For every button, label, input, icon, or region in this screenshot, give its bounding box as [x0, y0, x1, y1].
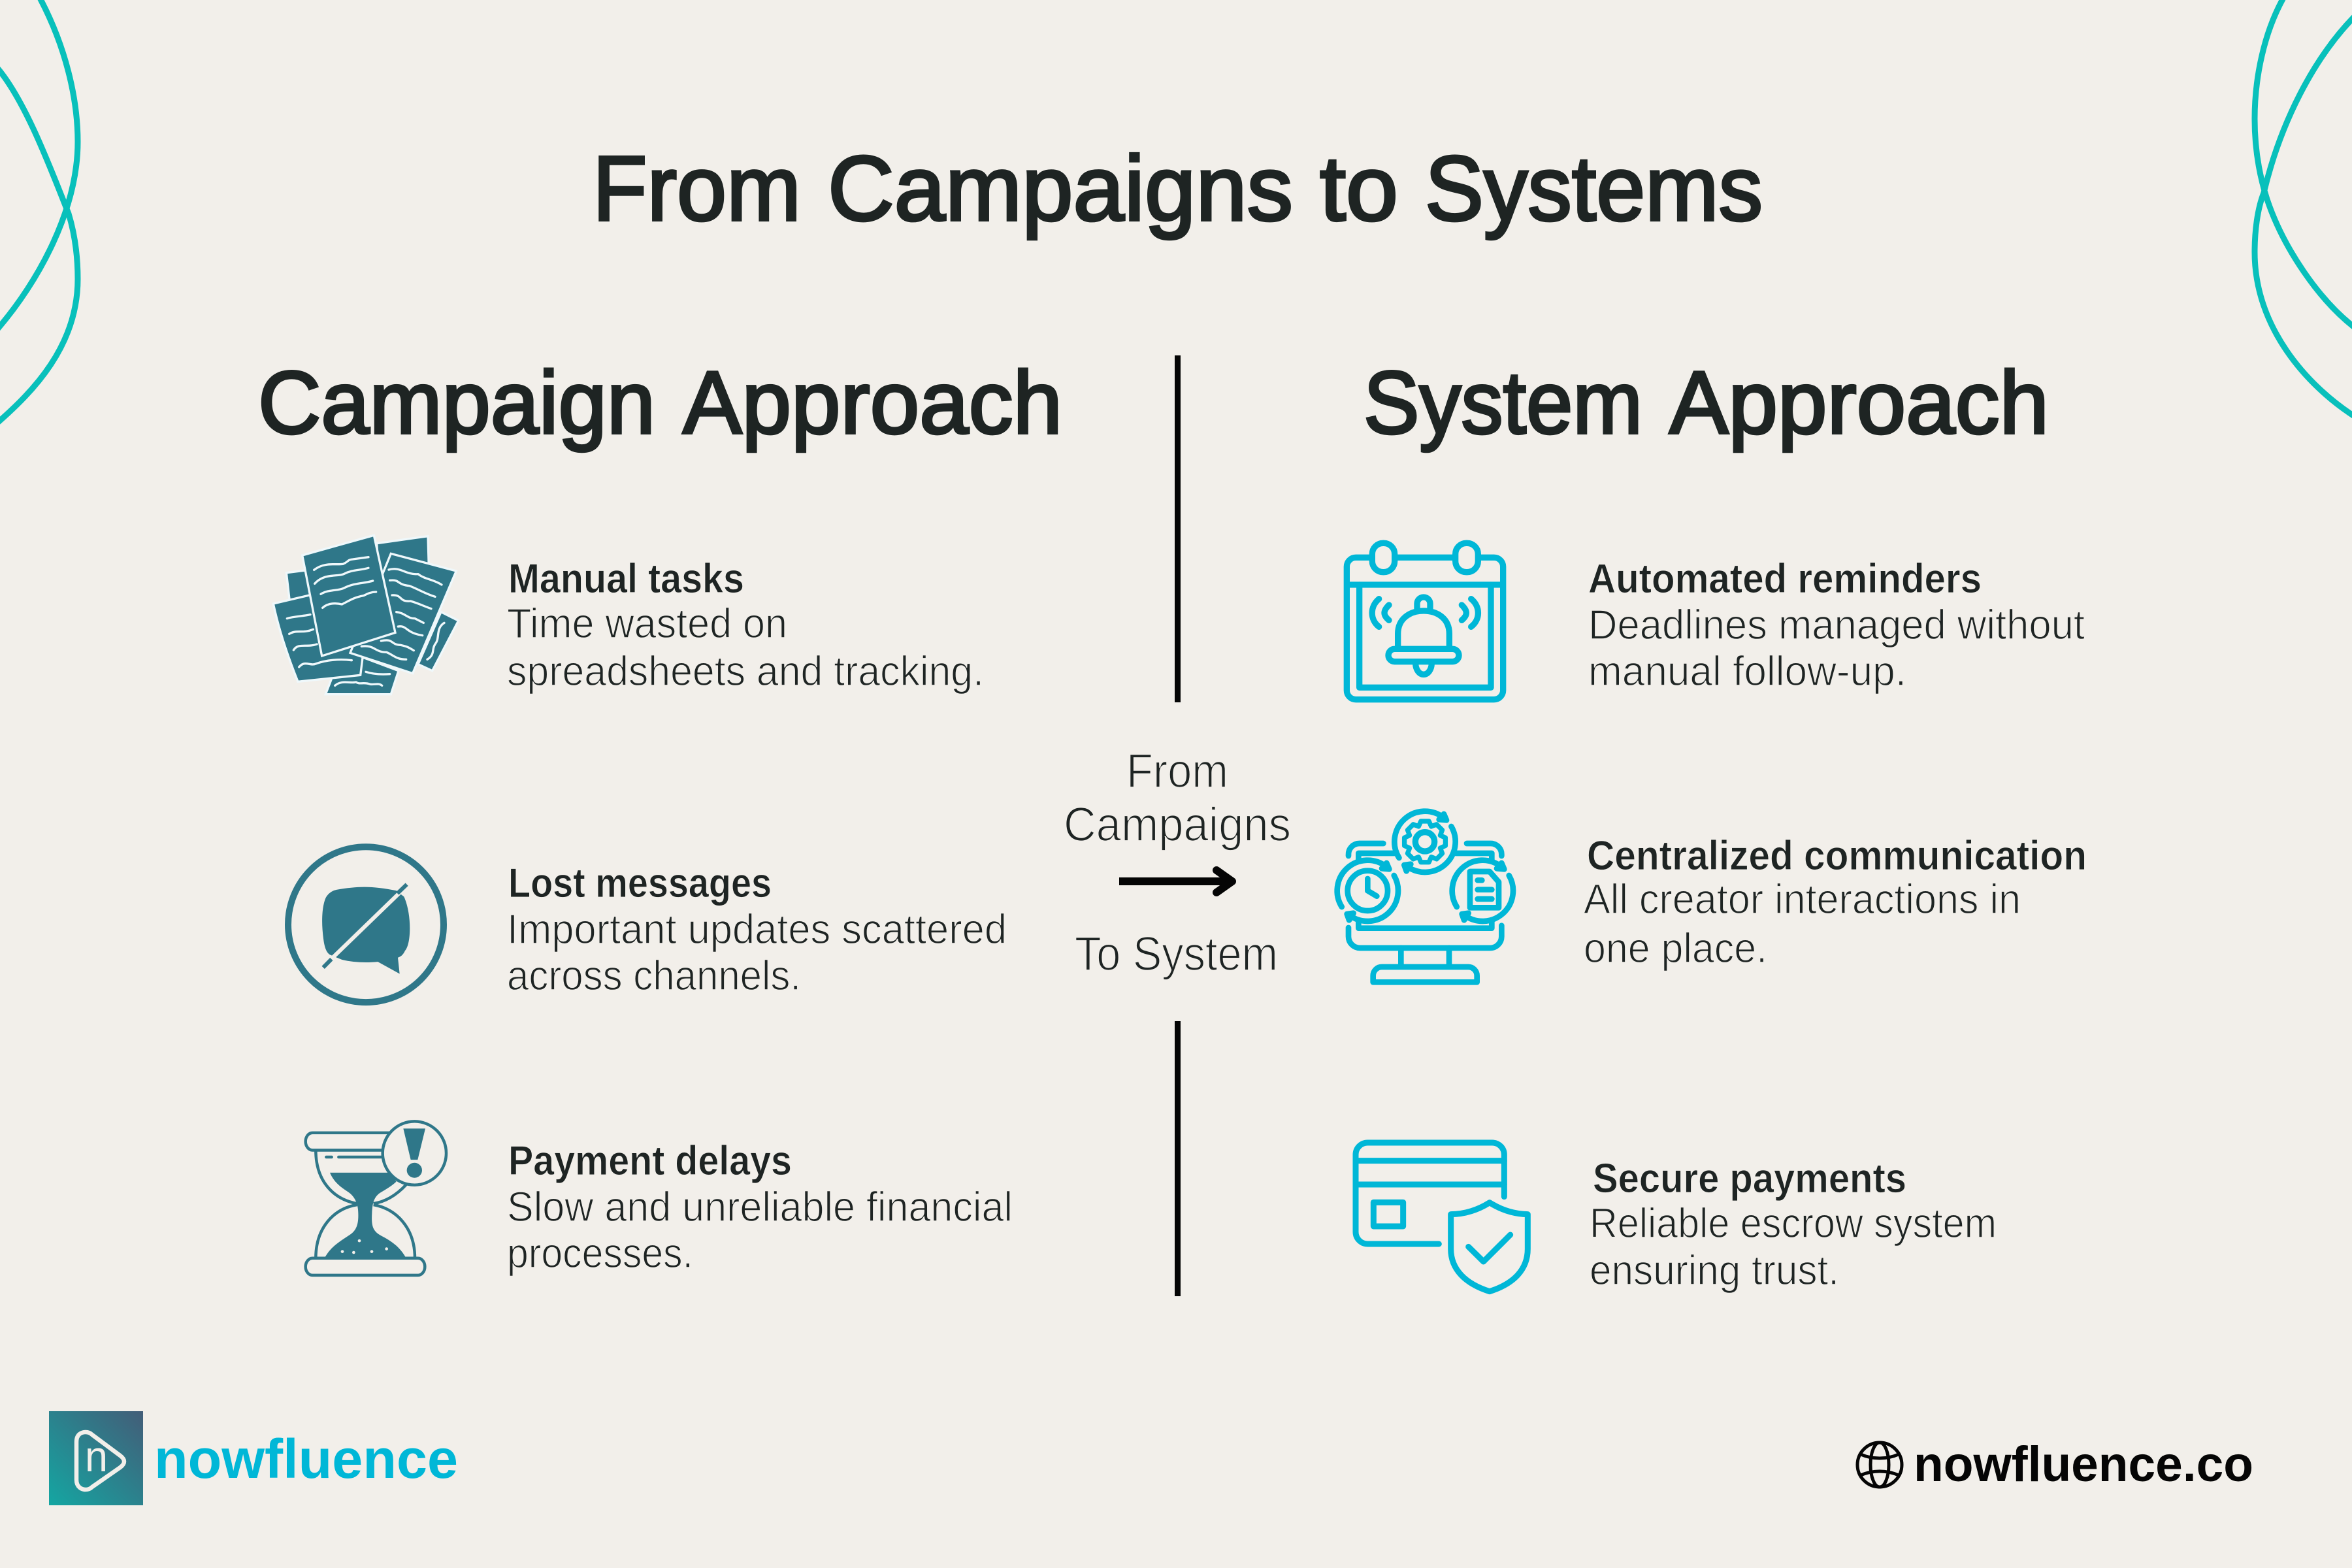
decorative curves top right	[2255, 0, 2352, 417]
title: to	[1320, 137, 1398, 240]
text block: automated reminders	[1588, 556, 2085, 694]
title: Systems	[1425, 137, 1763, 240]
text block: secure payments: Reliable escrow system	[1590, 1200, 1997, 1247]
text block: payment delays: Slow and unreliable financial	[507, 1183, 1013, 1230]
heading: campaign approach	[258, 353, 1062, 452]
center divider bottom	[1175, 1021, 1181, 1296]
logo mark: n	[85, 1432, 108, 1480]
text block: lost messages: Lost messages	[508, 860, 772, 906]
heading: system approach	[1364, 353, 2049, 452]
text block: centralized communication: All creator interactions in	[1584, 875, 2021, 923]
text block: payment delays: processes.	[507, 1230, 693, 1277]
center label: from campaigns to system	[1064, 745, 1291, 981]
text block: lost messages	[507, 860, 1007, 999]
text block: centralized communication	[1584, 833, 2087, 972]
text block: automated reminders: manual follow-up.	[1588, 647, 1906, 694]
text block: centralized communication: one place.	[1584, 924, 1767, 972]
title	[593, 137, 1763, 240]
icon: credit card with shield	[1356, 1143, 1527, 1292]
icon: hourglass with alert	[306, 1121, 446, 1275]
text block: manual tasks	[507, 556, 984, 694]
logo wordmark: nowfluence	[154, 1428, 458, 1490]
center label: from campaigns to system: Campaigns	[1064, 798, 1291, 851]
icon: monitor with process cycles	[1337, 811, 1513, 982]
heading: system approach: System	[1364, 353, 1642, 452]
logo mark	[49, 1411, 143, 1505]
icon: calendar with bell	[1347, 543, 1503, 700]
center label: from campaigns to system: To System	[1075, 928, 1278, 981]
text block: manual tasks: spreadsheets and tracking.	[507, 647, 984, 694]
text block: centralized communication: Centralized communication	[1587, 833, 2087, 879]
text block: payment delays: Payment delays	[508, 1138, 792, 1184]
text block: automated reminders: Deadlines managed without	[1588, 601, 2085, 648]
text block: secure payments: ensuring trust.	[1590, 1247, 1839, 1294]
website link	[1857, 1437, 2253, 1492]
center divider top	[1175, 355, 1181, 702]
icon: globe	[1857, 1443, 1902, 1487]
heading: campaign approach: Approach	[683, 353, 1062, 452]
icon: scattered documents	[273, 535, 459, 694]
arrow	[1119, 870, 1232, 892]
text block: payment delays	[507, 1138, 1013, 1277]
title: Campaigns	[828, 137, 1293, 240]
text block: secure payments	[1590, 1156, 1997, 1294]
text block: manual tasks: Time wasted on	[507, 600, 787, 647]
text block: lost messages: across channels.	[507, 952, 801, 999]
center label: from campaigns to system: From	[1126, 745, 1228, 798]
text block: lost messages: Important updates scattered	[507, 906, 1007, 953]
text block: secure payments: Secure payments	[1593, 1156, 1906, 1201]
text block: manual tasks: Manual tasks	[508, 556, 744, 602]
icon: muted message bubble	[288, 847, 444, 1002]
panel: system approach	[1337, 353, 2087, 1294]
decorative curves top left	[0, 0, 78, 423]
website text: nowfluence.co	[1914, 1437, 2253, 1492]
logo: nowfluence	[49, 1411, 458, 1505]
title: From	[593, 137, 801, 240]
heading: campaign approach: Campaign	[258, 353, 655, 452]
heading: system approach: Approach	[1669, 353, 2049, 452]
panel: campaign approach	[258, 353, 1062, 1277]
text block: automated reminders: Automated reminders	[1588, 556, 1982, 602]
